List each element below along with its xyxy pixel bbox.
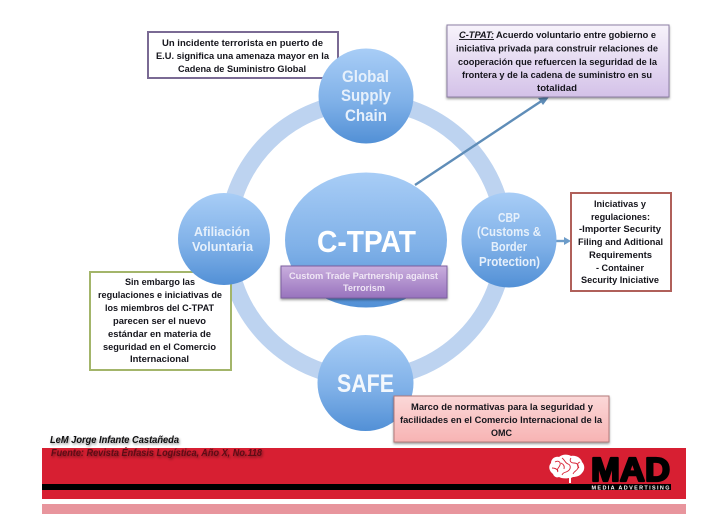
callout: C-TPAT definition: C-TPAT: [459, 30, 494, 40]
callout: members standard: estándar en materia de [108, 329, 211, 339]
callout: C-TPAT definition: cooperación que refuercen la seguridad de la [458, 57, 658, 67]
node: CBP: Border [491, 240, 527, 254]
callout: terrorist incident [148, 32, 338, 78]
callout: members standard [90, 272, 231, 370]
callout: members standard: Internacional [130, 354, 189, 364]
callout: SAFE framework: Marco de normativas para la seguridad y [411, 402, 594, 412]
callout: C-TPAT definition: iniciativa privada para construir relaciones de [456, 44, 658, 54]
ring connecting the nodes [228, 102, 504, 378]
node: Global Supply Chain: Supply [341, 86, 391, 105]
callout: initiatives and regulations: regulaciones: [591, 212, 650, 222]
node: SAFE: SAFE [337, 370, 394, 398]
subtitle banner: Custom Trade Partnership against [289, 271, 438, 281]
node: CBP: CBP [498, 211, 520, 225]
logo wordmark: MAD: MAD [591, 451, 670, 488]
node: Afiliación Voluntaria: Afiliación [194, 225, 250, 239]
callout: initiatives and regulations: Security Iniciative [581, 275, 659, 285]
callout: terrorist incident: E.U. significa una amenaza mayor en la [156, 51, 330, 61]
central node: C-TPAT [285, 172, 447, 308]
callout: initiatives and regulations: Requirements [589, 250, 652, 260]
node: CBP [462, 192, 556, 288]
callout: SAFE framework: facilidades en el Comercio Internacional de la [400, 415, 603, 425]
callout: C-TPAT definition [447, 25, 669, 97]
central node: C-TPAT: C-TPAT [317, 224, 416, 259]
logo tagline: MEDIA ADVERTISING [592, 485, 670, 491]
callout: terrorist incident: Un incidente terrorista en puerto de [162, 38, 323, 48]
node: CBP: (Customs & [477, 225, 541, 239]
node: Afiliación Voluntaria: Voluntaria [192, 240, 254, 254]
callout: members standard: seguridad en el Comercio [103, 342, 216, 352]
callout: C-TPAT definition: frontera y de la cadena de suministro en su [462, 70, 652, 80]
node: Global Supply Chain: Chain [345, 106, 387, 125]
callout: SAFE framework [394, 396, 609, 442]
subtitle banner [281, 266, 447, 298]
source credit: Fuente: Revista Énfasis Logística, Año X, No.118 [51, 446, 262, 459]
callout: members standard: parecen ser el nuevo [113, 316, 206, 326]
arrow: C-TPAT to definition [415, 97, 549, 185]
callout: members standard: los miembros del C-TPAT [105, 303, 214, 313]
callout: SAFE framework: OMC [491, 428, 512, 438]
subtitle banner: Terrorism [343, 283, 385, 293]
arrow: CBP to initiatives [556, 237, 571, 245]
node: Global Supply Chain [318, 48, 414, 144]
callout: members standard: Sin embargo las [125, 277, 195, 287]
icon: brain logo [549, 455, 584, 483]
callout: initiatives and regulations: -Importer Security [579, 224, 662, 234]
callout: C-TPAT definition: Acuerdo voluntario entre gobierno e [496, 30, 656, 40]
author credit: LeM Jorge Infante Castañeda [50, 435, 179, 446]
node: SAFE [318, 335, 414, 431]
callout: initiatives and regulations: Iniciativas y [594, 199, 647, 209]
callout: members standard: regulaciones e iniciativas de [98, 290, 222, 300]
node: Afiliación Voluntaria [178, 193, 270, 285]
callout: terrorist incident: Cadena de Suministro Global [178, 64, 306, 74]
node: Global Supply Chain: Global [342, 67, 389, 86]
callout: C-TPAT definition: totalidad [537, 83, 577, 93]
callout: initiatives and regulations: - Container [596, 263, 644, 273]
node: CBP: Protection) [479, 255, 540, 269]
footer band [42, 448, 686, 514]
callout: initiatives and regulations: Filing and Aditional [578, 237, 663, 247]
callout: initiatives and regulations [571, 193, 671, 291]
